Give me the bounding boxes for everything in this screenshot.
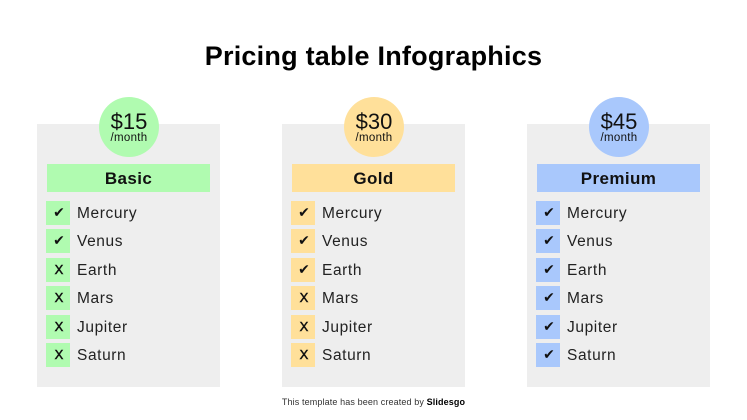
price period: /month: [356, 132, 392, 144]
panel background: [282, 124, 465, 387]
feature: Mercury included: Mercury: [77, 205, 137, 222]
feature: Venus included: Venus: [567, 233, 613, 250]
plan heading: [292, 164, 455, 192]
feature: Mars included: [536, 286, 604, 310]
feature: Venus included: Venus: [77, 233, 123, 250]
feature: Saturn excluded: X: [55, 347, 63, 362]
feature: Mars included: ✔: [543, 290, 555, 306]
feature: Jupiter excluded: X: [300, 319, 308, 334]
plan heading: Gold: [353, 169, 394, 188]
feature: Mars excluded: [46, 286, 114, 310]
feature: Jupiter included: ✔: [543, 319, 555, 335]
feature: Mercury included: [46, 201, 137, 225]
footer credit: This template has been created by Slidesgo: [282, 397, 465, 407]
price period: /month: [601, 132, 637, 144]
plan heading: Basic: [105, 169, 152, 188]
feature: Mercury included: ✔: [543, 205, 555, 221]
feature: Saturn excluded: X: [300, 347, 308, 362]
plan heading: Premium: [581, 169, 656, 188]
feature: Earth included: [291, 258, 362, 282]
feature: Venus included: Venus: [322, 233, 368, 250]
feature: Saturn excluded: Saturn: [77, 347, 126, 364]
feature: Venus included: [46, 229, 123, 253]
feature: Mars excluded: X: [55, 290, 63, 305]
feature: Mercury included: ✔: [298, 205, 310, 221]
feature: Venus included: [536, 229, 613, 253]
panel background: [527, 124, 710, 387]
title: Pricing table Infographics: [205, 41, 542, 71]
feature: Mercury included: Mercury: [322, 205, 382, 222]
feature: Venus included: ✔: [298, 233, 310, 249]
price badge circle: [344, 97, 404, 157]
feature: Mars excluded: [291, 286, 359, 310]
feature: Jupiter excluded: [46, 315, 128, 339]
feature: Venus included: [291, 229, 368, 253]
feature: Jupiter excluded: Jupiter: [77, 319, 128, 336]
feature: Jupiter included: [536, 315, 618, 339]
plan heading: [47, 164, 210, 192]
feature: Earth included: Earth: [567, 262, 607, 279]
price badge circle: [99, 97, 159, 157]
feature: Saturn excluded: [291, 343, 371, 367]
feature: Jupiter excluded: Jupiter: [322, 319, 373, 336]
feature: Venus included: ✔: [53, 233, 65, 249]
feature: Mercury included: [536, 201, 627, 225]
feature: Mars excluded: X: [300, 290, 308, 305]
feature: Saturn included: [536, 343, 616, 367]
feature: Jupiter excluded: [291, 315, 373, 339]
feature: Mercury included: Mercury: [567, 205, 627, 222]
feature: Earth included: [536, 258, 607, 282]
feature: Venus included: ✔: [543, 233, 555, 249]
feature: Jupiter excluded: X: [55, 319, 63, 334]
feature: Mars excluded: Mars: [77, 290, 114, 307]
feature: Saturn excluded: Saturn: [322, 347, 371, 364]
panel background: [37, 124, 220, 387]
feature: Saturn excluded: [46, 343, 126, 367]
feature: Jupiter included: Jupiter: [567, 319, 618, 336]
feature: Earth included: ✔: [543, 262, 555, 278]
price period: /month: [111, 132, 147, 144]
price badge circle: [589, 97, 649, 157]
feature: Mercury included: ✔: [53, 205, 65, 221]
feature: Mars excluded: Mars: [322, 290, 359, 307]
price: $45: [601, 109, 637, 134]
feature: Earth excluded: [46, 258, 117, 282]
feature: Mars included: Mars: [567, 290, 604, 307]
feature: Earth included: ✔: [298, 262, 310, 278]
price: $15: [111, 109, 147, 134]
plan heading: [537, 164, 700, 192]
feature: Mercury included: [291, 201, 382, 225]
price: $30: [356, 109, 392, 134]
panel: Premium plan: [527, 97, 710, 387]
feature: Earth included: Earth: [322, 262, 362, 279]
feature: Earth excluded: Earth: [77, 262, 117, 279]
panel: Gold plan: [282, 97, 465, 387]
feature: Saturn included: ✔: [543, 347, 555, 363]
feature: Saturn included: Saturn: [567, 347, 616, 364]
feature: Earth excluded: X: [55, 262, 63, 277]
panel: Basic plan: [37, 97, 220, 387]
